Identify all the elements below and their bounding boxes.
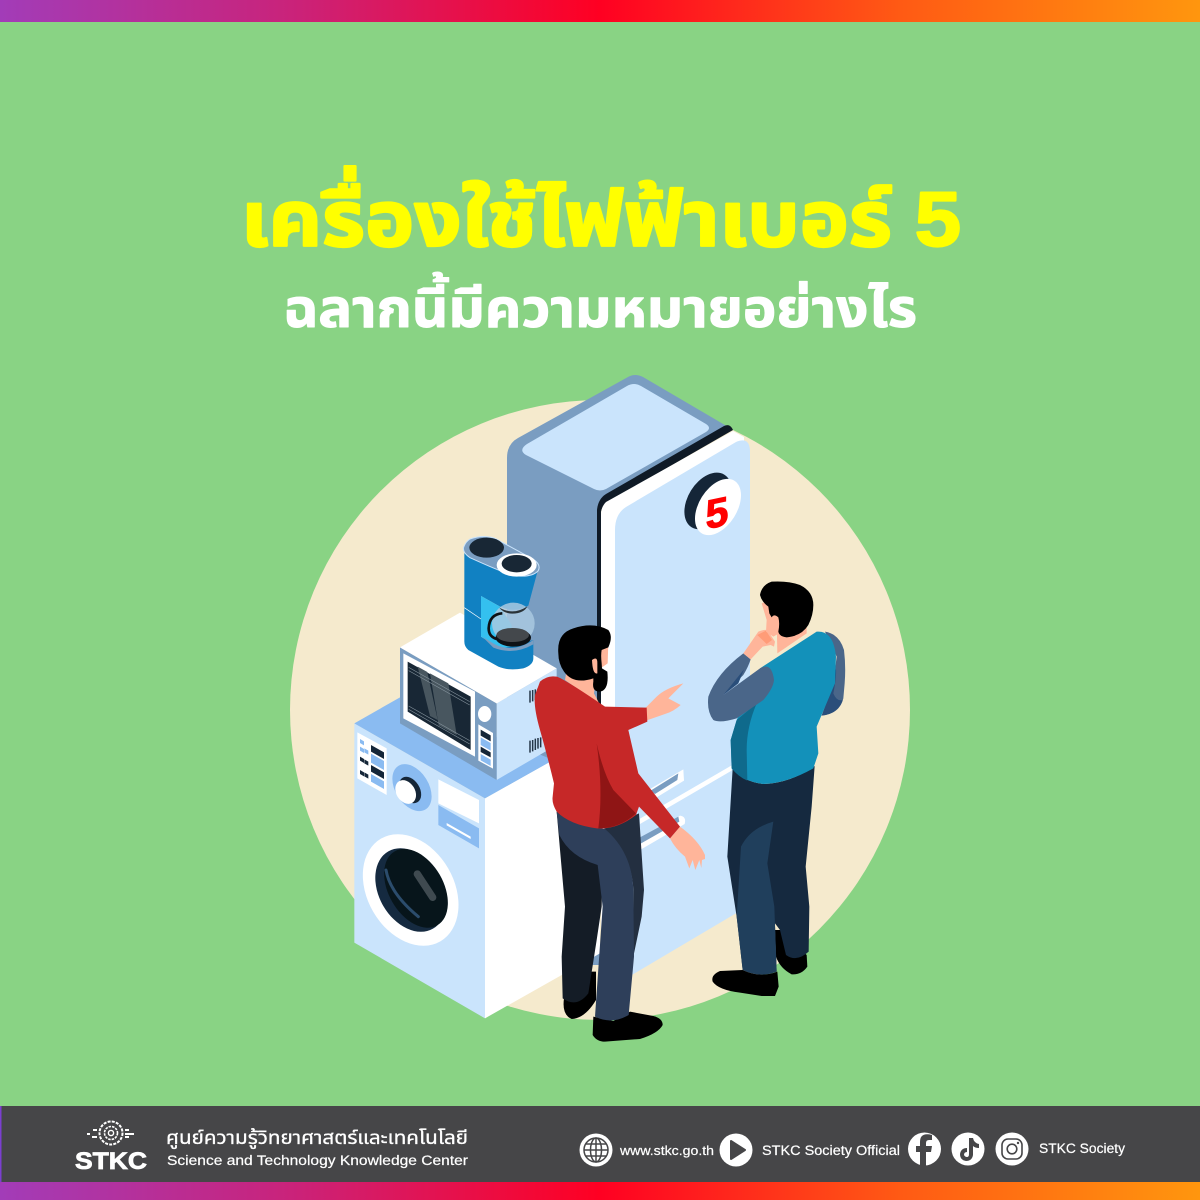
water tank lid bbox=[463, 536, 539, 577]
blue sweater bbox=[731, 632, 836, 784]
back sleeve bbox=[822, 632, 845, 716]
trousers bbox=[727, 766, 815, 975]
social account name: STKC Society bbox=[1039, 1141, 1125, 1156]
beige circle backdrop bbox=[290, 400, 910, 1020]
raised arm bbox=[708, 653, 774, 721]
top gradient bar bbox=[0, 0, 1200, 22]
illustration: appliances and two men bbox=[343, 375, 845, 1042]
logo emblem bbox=[87, 1122, 134, 1144]
control panel bbox=[357, 732, 387, 795]
coffee maker back wall bbox=[481, 596, 512, 648]
front leg and shoe bbox=[557, 812, 663, 1042]
icon: website globe bbox=[580, 1134, 612, 1166]
neck bbox=[565, 670, 600, 705]
icon: facebook bbox=[908, 1132, 941, 1166]
subtitle: ฉลากนี้มีความหมายอย่างไร bbox=[283, 272, 917, 339]
video channel name: STKC Society Official bbox=[762, 1143, 900, 1158]
display bbox=[438, 779, 479, 848]
red sweater bbox=[535, 676, 680, 838]
dial bbox=[384, 757, 440, 818]
logo: STKC bbox=[75, 1122, 147, 1175]
coffee maker body bbox=[464, 552, 538, 669]
head and hair bbox=[760, 581, 813, 637]
energy label badge number 5 bbox=[675, 464, 751, 543]
footer panel bbox=[0, 1106, 1200, 1182]
neck bbox=[777, 620, 807, 653]
logo: STKC: STKC bbox=[75, 1148, 147, 1175]
hands bbox=[645, 683, 705, 870]
head with beard bbox=[558, 625, 611, 692]
hand at chin bbox=[743, 630, 775, 659]
washing machine bbox=[343, 697, 600, 1018]
icon: tiktok bbox=[952, 1132, 984, 1166]
refrigerator bbox=[507, 375, 751, 993]
porthole door bbox=[343, 817, 478, 963]
vents bbox=[530, 688, 541, 753]
back shoe bbox=[775, 930, 807, 974]
knob and buttons bbox=[478, 706, 493, 769]
microwave bbox=[400, 613, 557, 780]
back leg and shoe bbox=[557, 812, 603, 1019]
microwave window bbox=[403, 653, 475, 757]
freezer divider and handles bbox=[640, 765, 732, 850]
organisation name in English: Science and Technology Knowledge Center bbox=[167, 1153, 469, 1168]
energy label badge number 5: 5 bbox=[706, 487, 728, 538]
organisation name in Thai: ศูนย์ความรู้วิทยาศาสตร์และเทคโนโลยี bbox=[166, 1126, 468, 1150]
man in blue sweater bbox=[708, 581, 845, 996]
bottom gradient bar bbox=[0, 1182, 1200, 1200]
title: เครื่องใช้ไฟฟ้าเบอร์ 5 bbox=[241, 166, 961, 263]
icon: video play bbox=[720, 1134, 752, 1166]
icon: instagram bbox=[996, 1132, 1028, 1166]
website address: www.stkc.go.th bbox=[619, 1143, 714, 1158]
glass carafe bbox=[483, 603, 535, 651]
man in red sweater bbox=[535, 625, 705, 1042]
front shoe bbox=[712, 970, 779, 996]
coffee maker bbox=[463, 536, 539, 669]
